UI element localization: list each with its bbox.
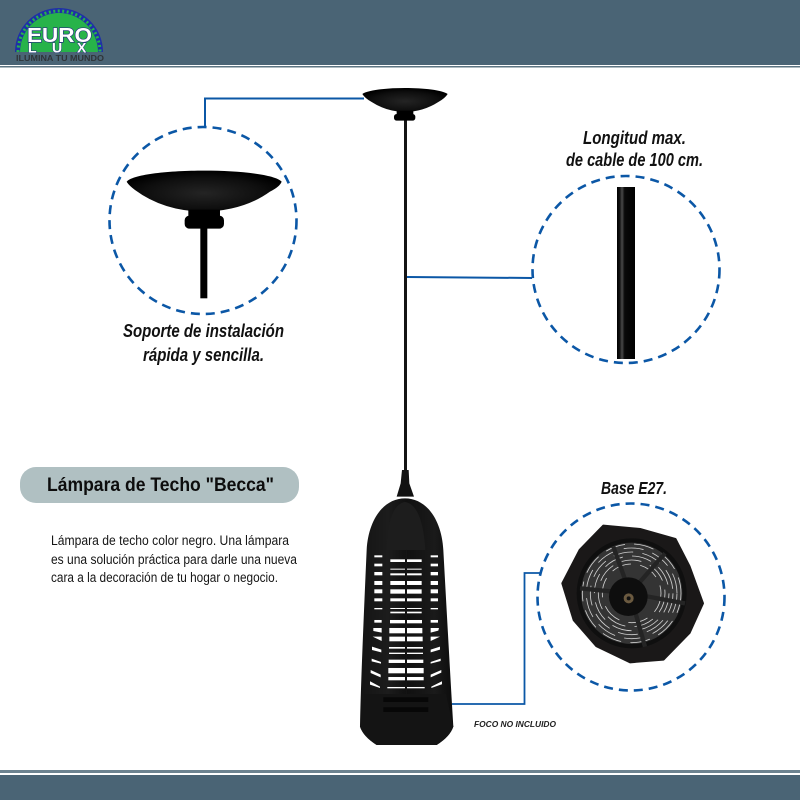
connector: lamp base to detail circle (452, 573, 540, 704)
description text: Lámpara de techo color negro. Una lámpara (51, 533, 289, 548)
cable of pendant lamp (404, 118, 407, 486)
caption: base: Base E27. (601, 478, 667, 498)
caption: cable length: de cable de 100 cm. (566, 150, 703, 170)
detail circle: cable (532, 176, 720, 363)
caption: ceiling mount (123, 321, 284, 365)
caption: ceiling mount: rápida y sencilla. (143, 345, 264, 365)
logo: Eurolux: EURO (27, 25, 92, 47)
logo: Eurolux: ILUMINA TU MUNDO (16, 53, 104, 63)
caption: ceiling mount: Soporte de instalación (123, 321, 284, 341)
description text: cara a la decoración de tu hogar o negocio. (51, 570, 278, 585)
ceiling mount (362, 88, 448, 121)
caption: cable length: Longitud max. (583, 128, 686, 148)
connector: cable to detail circle (407, 277, 532, 278)
connector: ceiling mount to detail circle (205, 98, 364, 128)
caption: cable length (566, 128, 703, 170)
detail circle: base E27 (538, 504, 724, 690)
title pill (20, 467, 299, 503)
description text (51, 533, 297, 585)
logo: Eurolux: X (77, 40, 87, 56)
logo: Eurolux (15, 8, 104, 63)
description text: es una solución práctica para darle una nueva (51, 552, 297, 567)
detail circle: ceiling mount (110, 127, 296, 314)
logo: Eurolux: L (28, 40, 37, 56)
header band (0, 0, 800, 68)
note: bulb not included: FOCO NO INCLUIDO (474, 719, 556, 729)
logo: Eurolux: U (52, 40, 62, 56)
footer band (0, 770, 800, 800)
title pill: Lámpara de Techo "Becca" (47, 475, 274, 496)
pendant lamp body (360, 470, 453, 745)
